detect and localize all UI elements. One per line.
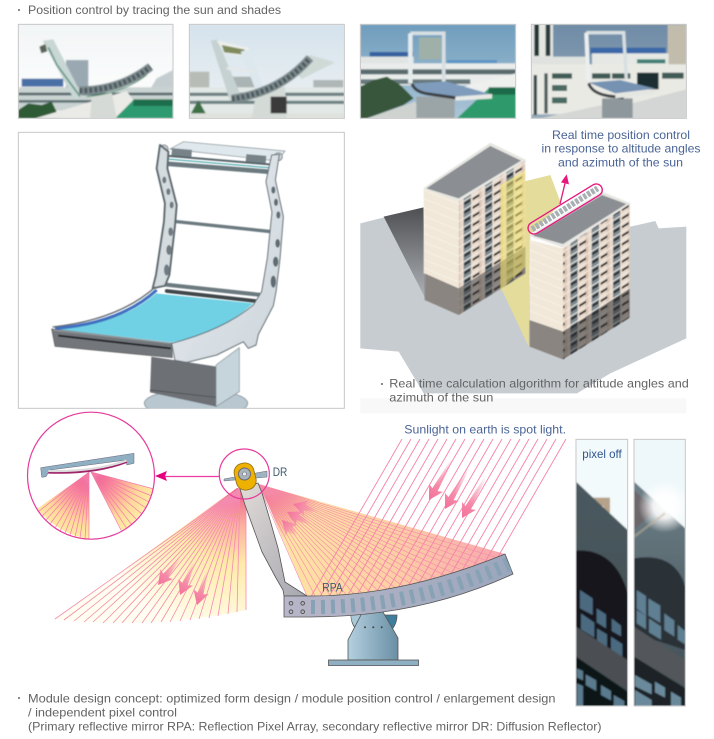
text block: module design concept: (Primary reflective mirror RPA: Reflection Pixel Array, secondary reflective mirror DR: Diffusion Reflector) xyxy=(28,719,602,733)
photo: pixel on, sun reflection xyxy=(634,439,692,706)
panel: CAD model of solar collector module xyxy=(18,132,344,417)
label: pixel off: pixel off xyxy=(582,447,622,461)
caption: real time calculation: azimuth of the sun xyxy=(389,391,493,405)
pink capsule highlight xyxy=(526,182,605,236)
ground shadow xyxy=(360,207,686,393)
photo: pixel off xyxy=(576,439,628,706)
reflective mirror surface xyxy=(53,287,253,342)
dark shade behind building xyxy=(384,207,425,298)
pedestal box xyxy=(150,348,239,407)
text block: module design concept: Module design concept: optimized form design / module position control / enlargement design xyxy=(28,691,556,705)
building right xyxy=(529,192,631,359)
caption: real time calculation: Real time calculation algorithm for altitude angles and xyxy=(389,377,689,391)
arm xyxy=(240,483,307,596)
callout: real time position control: Real time position control xyxy=(552,128,690,142)
label: sunlight: Sunlight on earth is spot light. xyxy=(404,422,566,436)
photo 2: collector open, midday xyxy=(189,24,344,118)
photo 3: collector horizontal, frame upright xyxy=(360,24,516,118)
callout: real time position control: in response to altitude angles xyxy=(542,142,700,156)
top roller panel xyxy=(160,142,285,165)
arrow: position control xyxy=(560,174,569,204)
pedestal xyxy=(328,612,418,666)
RPA mirror array xyxy=(284,554,513,617)
label: RPA: RPA xyxy=(322,581,343,595)
front rail xyxy=(52,329,172,358)
panel: building shadow diagram xyxy=(360,143,686,413)
DR reflector head xyxy=(224,461,267,492)
bottom caption strip xyxy=(360,398,686,413)
photo 4: collector horizontal, closer view xyxy=(531,24,686,118)
highlight circle around DR xyxy=(219,449,269,499)
text block: module design concept: / independent pixel control xyxy=(28,706,177,720)
sunlight beam xyxy=(500,175,561,347)
building left xyxy=(423,143,526,315)
arrows: diffused light xyxy=(152,552,215,607)
text block: module design concept xyxy=(18,691,602,733)
caption: real time calculation xyxy=(381,377,689,405)
optical diagram: diffusion fan to ground xyxy=(55,488,246,623)
right side plate xyxy=(172,154,283,362)
left arm xyxy=(153,145,177,288)
callout: real time position control xyxy=(542,128,700,170)
photo 1: collector tilted, morning xyxy=(18,24,173,118)
arrows: incoming sunlight xyxy=(422,454,493,522)
label: DR: DR xyxy=(273,465,288,479)
rear cross bars xyxy=(163,159,272,301)
callout: real time position control: and azimuth of the sun xyxy=(558,156,683,170)
optical diagram: incoming parallel sunlight xyxy=(309,439,566,600)
rooftop collector row xyxy=(532,188,598,229)
arrow: DR to magnified view xyxy=(155,471,219,481)
base turntable xyxy=(143,393,249,408)
arrows: reflected light xyxy=(276,496,320,542)
heading: position control: Position control by tracing the sun and shades xyxy=(28,3,281,17)
optical diagram: reflected fan RPA to DR xyxy=(258,484,505,596)
magnified view: DR reflector xyxy=(28,412,154,539)
